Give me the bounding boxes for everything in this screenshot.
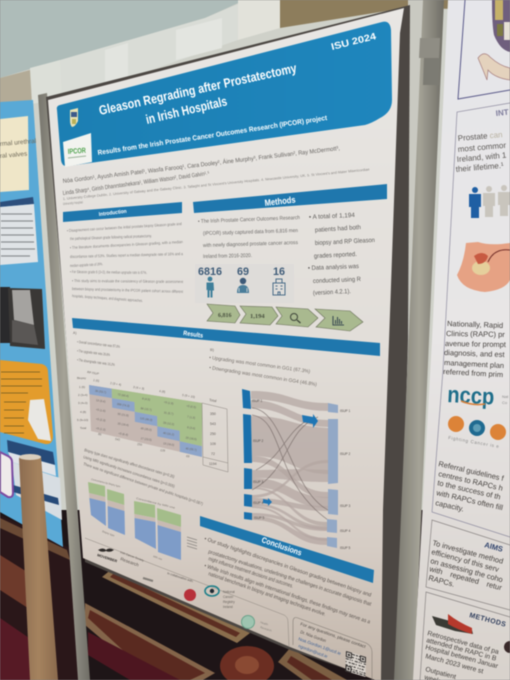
conclusions text: national benchmark in biopsy and imaging techniques evolve.	[207, 571, 326, 618]
methods text right: biopsy and RP Gleason	[315, 237, 375, 247]
introduction text: • For Gleason grade 6 (3+3), the median upgrade rate is 67%.	[70, 269, 147, 275]
aims text: with repeated retur	[428, 564, 503, 592]
methods text: attended the RAPC in B	[425, 637, 497, 663]
table totals column: 350	[210, 412, 216, 416]
conclusions text: • While Irish results align with international findings, these findings may serve as a	[203, 563, 371, 626]
results summary A	[73, 331, 120, 367]
tagline: Fighting Cancer is e	[448, 435, 500, 449]
left stand pole	[38, 93, 90, 680]
sankey flows	[251, 391, 328, 545]
logo: Irish Cancer Society	[120, 550, 145, 568]
table: biopsy versus RP grade: Total	[209, 398, 217, 403]
table: biopsy versus RP grade: 129	[160, 448, 166, 453]
methods text right: conducted using R	[313, 276, 361, 285]
icon: crest	[478, 0, 510, 80]
results summary B: • Downgrading was most common in GG4 (46.8%)	[209, 365, 318, 388]
sankey left bars	[242, 389, 252, 520]
table: biopsy versus RP grade: 69	[186, 454, 190, 459]
table: biopsy versus RP grade: 542	[115, 437, 121, 442]
table: biopsy versus RP grade: 31 (5.7)	[164, 410, 174, 416]
icon: shoe	[432, 614, 473, 634]
referral text: Referral guidelines f	[438, 459, 505, 483]
methods text right: patients had both	[315, 224, 361, 234]
introduction text: the pathological Gleason grade following radical prostatectomy.	[70, 233, 152, 241]
methods text left: Ireland from 2016-2020.	[203, 253, 252, 260]
table: biopsy versus RP grade: 2 (3+4)	[78, 393, 88, 397]
icon: grey people	[483, 185, 510, 217]
introduction text: median upgrade rate of 29%.	[70, 261, 103, 268]
arrow: downgrade	[263, 498, 272, 506]
methods text right: (version 4.2.1).	[313, 288, 351, 297]
subtitle: Results from the Irish Prostate Cancer Outcomes Research (IPCOR) project	[97, 115, 328, 157]
sankey labels	[252, 399, 351, 550]
logo: red partner	[184, 589, 196, 601]
results summary B: B)	[210, 347, 215, 352]
header banner	[57, 22, 392, 167]
icon: QR code	[345, 651, 366, 677]
footer logos	[85, 538, 289, 647]
left poster caption panel: ral valves	[0, 151, 28, 160]
authors: Nóa Gordon¹, Ayush Amish Patel¹, Wasfa Farooq¹, Cara Dooley², Áine Murphy³, Frank Sullivan², Ray McDermott³,	[62, 145, 341, 185]
right neighbouring poster	[413, 0, 510, 680]
table: biopsy versus RP grade: <5 (1.2)	[96, 426, 106, 432]
heading: methods: Methods	[264, 195, 296, 208]
panel: results	[72, 318, 380, 561]
introduction text: • This study aims to evaluate the consistency of Gleason grade assessment	[72, 278, 184, 284]
chart labels: Biopsy type	[102, 530, 115, 538]
icon: doctor	[237, 278, 249, 293]
table: biopsy versus RP grade: 36 (53.7)	[95, 389, 107, 394]
table totals column: 109	[210, 442, 216, 446]
methods text right	[308, 212, 375, 297]
table: biopsy versus RP grade: 86 (15.7)	[140, 406, 152, 412]
referral text: to the success of th	[437, 478, 502, 501]
chart labels: MRI use	[153, 555, 163, 561]
chart labels: Concordance by biopsy type	[91, 478, 121, 488]
sankey labels: ISUP 5	[340, 546, 351, 550]
stats panel	[195, 264, 294, 303]
table: biopsy versus RP grade: <5 (0.5)	[186, 404, 196, 409]
sankey labels: ISUP 5	[254, 516, 265, 520]
collaboration label: In collaboration with:	[167, 571, 194, 583]
chart legend	[187, 537, 197, 549]
carpet floor	[0, 510, 510, 680]
findings notes: There was no significant difference between private and public hospitals (p=0.087)	[83, 461, 204, 506]
contact text: ngordon@ucd.ie	[298, 643, 329, 659]
logo: green partner	[242, 616, 273, 633]
table: biopsy versus RP grade: 40 (55.7)	[185, 446, 197, 452]
methods text: March 2023 were st	[424, 653, 484, 675]
table: biopsy versus RP grade: 2 (3 + 4)	[110, 381, 122, 387]
table: biopsy versus RP grade: 25 (18.5)	[185, 436, 197, 441]
intro text: Ireland, with 1	[456, 151, 507, 164]
table: biopsy versus RP grade: 4 (8)	[159, 389, 166, 394]
right stand pole	[394, 0, 444, 680]
poster sheet	[48, 8, 404, 680]
sankey labels: ISUP 4	[340, 529, 351, 533]
table totals column: 1194	[209, 462, 217, 466]
heading: AIMS: AIMS	[483, 540, 504, 554]
logo: National Cancer Registry Ireland: Cancer	[223, 595, 234, 599]
aims text	[427, 538, 504, 592]
table totals column: 72	[211, 452, 215, 456]
national RAPC text	[443, 319, 507, 379]
anatomy illustration	[457, 242, 510, 292]
title: Gleason Regrading after Prostatectomy	[97, 60, 299, 118]
table: biopsy versus RP grade: <5 (1.6)	[96, 407, 106, 413]
table: biopsy versus RP grade: 7 (1.3)	[187, 415, 196, 420]
table: biopsy versus RP grade: 8 (3.4)	[187, 425, 196, 430]
national RAPC text: management plan	[444, 358, 504, 370]
methods text	[423, 630, 500, 680]
table: biopsy versus RP grade: <5 (6.4)	[118, 431, 128, 437]
display board frame	[46, 5, 410, 680]
methods text left: • The Irish Prostate Cancer Outcomes Research	[198, 215, 300, 225]
left poster orange callout	[0, 360, 53, 444]
contact text	[298, 621, 367, 659]
heading: introduction: Introduction	[99, 209, 128, 218]
sankey labels: ISUP 2	[253, 439, 264, 443]
methods text: Retrospective data of pa	[426, 630, 500, 656]
introduction text: • The literature documents discrepancies in Gleason grading, with a median	[70, 239, 183, 250]
sankey labels: ISUP 2	[340, 452, 351, 456]
logo: nccp: Co	[502, 400, 508, 405]
table: biopsy versus RP grade: 40 (31.2)	[163, 431, 175, 437]
table: biopsy versus RP grade: 86	[98, 432, 102, 437]
table: biopsy versus RP grade: 45 (35.0)	[140, 426, 152, 432]
chevron process	[207, 304, 363, 331]
findings notes: Biopsy type does not significantly affect discordance rates (p=0.35)	[84, 447, 176, 479]
heading: results: Results	[183, 330, 204, 340]
logo: Movember: MOVEMBER	[97, 553, 118, 563]
left poster caption panel	[0, 116, 37, 192]
results summary A: • Overall concordance rate was 57.0%	[77, 340, 120, 349]
national RAPC text: diagnosis, and est	[444, 348, 506, 359]
chevron: magnifier icon	[276, 307, 318, 327]
cardboard poster tube	[19, 454, 58, 680]
heading: results	[72, 318, 380, 356]
referral text: with RAPCs often fill	[435, 488, 504, 512]
table: biopsy versus RP grade: 55 (21.9)	[117, 412, 129, 417]
panel: methods	[193, 184, 387, 331]
stats panel: 69	[237, 266, 249, 278]
logo: green partner: Health	[260, 620, 269, 627]
table totals column: 543	[210, 422, 216, 426]
referral text: centres to RAPCs h	[438, 469, 504, 493]
table: biopsy versus RP grade: 5 (9 + 10)	[182, 393, 195, 399]
title	[97, 60, 299, 127]
table totals column	[202, 403, 228, 472]
left poster purple box	[0, 452, 13, 497]
national RAPC text: avenue for prompt	[445, 339, 507, 349]
contact text: Noa.Gordon.1@ucd.ie	[298, 636, 342, 656]
introduction text: between biopsy and prostatectomy in the IPCOR patient cohort across different	[72, 286, 184, 294]
table: biopsy versus RP grade: 399 (74.3)	[117, 402, 130, 408]
results summary B	[209, 347, 318, 388]
icon: hospital	[273, 279, 285, 295]
table: biopsy versus RP grade: 3 (4+3)	[78, 401, 88, 405]
findings notes: Using MRI significantly increases concordance rates (p<0.005)	[83, 454, 176, 489]
table: biopsy versus RP grade: 115 (46.0)	[140, 416, 153, 422]
left poster table panels	[7, 440, 62, 520]
introduction text: discordance rate of 53%. Studies report a median downgrade rate of 16% and a	[70, 251, 184, 259]
logo: National Cancer Registry Ireland: Ireland	[223, 605, 233, 609]
logo: nccp: Nat	[502, 394, 509, 399]
national RAPC text: Nationally, Rapid	[447, 319, 503, 330]
table: biopsy versus RP grade: 29 (12.2)	[163, 421, 175, 426]
contact text: Dr. Nóa Gordon	[300, 629, 327, 643]
sankey diagram	[242, 389, 351, 550]
table: biopsy versus RP grade: 4 (8)	[80, 410, 86, 414]
chevron: 6,816	[207, 304, 240, 323]
panel: introduction box	[432, 103, 510, 537]
referral text: capacity.	[435, 498, 465, 513]
table: biopsy versus RP grade: <5 (1.9)	[164, 400, 174, 406]
methods text right: grades reported.	[314, 251, 357, 260]
table: biopsy versus RP grade: 5 (9+10)	[77, 418, 88, 422]
intro text: Prostate can	[457, 130, 503, 143]
sankey crossing links	[252, 408, 328, 520]
methods text left: (IPCOR) study captured data from 6,816 men	[203, 228, 298, 237]
wooden floor rail under left poster	[0, 518, 70, 560]
methods text right: • A total of 1,194	[309, 212, 356, 221]
logo: National Cancer Registry Ireland	[205, 586, 235, 609]
sankey labels: ISUP 4	[253, 501, 264, 505]
aims text: To investigate method	[431, 538, 504, 566]
contact box	[293, 618, 372, 680]
panel: methods	[420, 592, 510, 680]
intro text: most commor	[457, 141, 507, 154]
sankey labels: ISUP 3	[340, 504, 351, 508]
national RAPC text: referred from prim	[443, 367, 503, 379]
bar: group 3	[134, 501, 156, 549]
heading: METHODS: METHODS	[468, 612, 507, 629]
results summary B: • Upgrading was most common in GG1 (67.3%)	[209, 355, 311, 375]
heading: conclusions: Conclusions	[260, 535, 303, 558]
aims text: RAPCs.	[427, 573, 456, 589]
methods text left	[198, 215, 300, 260]
logo: IPCOR	[63, 133, 92, 167]
stacked bar charts	[88, 478, 197, 561]
bar: group 2	[107, 489, 125, 535]
chevron: 1,194	[240, 306, 278, 325]
methods text right: • Data analysis was	[308, 263, 359, 272]
results summary A: • The upgrade rate was 26.8%	[77, 349, 111, 357]
results summary A: A)	[73, 331, 76, 335]
contact text: For any questions, please contact	[300, 621, 367, 649]
national RAPC text: Clinics (RAPC) pr	[446, 329, 505, 339]
arrow: upgrade	[302, 414, 318, 428]
table: biopsy versus RP grade: 8 (4.5)	[142, 396, 151, 402]
sankey right bars	[327, 403, 338, 548]
icon: university crest	[70, 108, 78, 127]
title: in Irish Hospitals	[144, 93, 228, 127]
heading: methods	[193, 184, 387, 213]
introduction text: • Disagreement can occur between the initial prostate biopsy Gleason grade and	[67, 221, 182, 233]
table: biopsy versus RP grade: 1 (6)	[93, 378, 100, 383]
stats panel: 6816	[198, 266, 222, 278]
logo: National Cancer Registry Ireland: Registry	[223, 600, 235, 604]
introduction text	[67, 221, 184, 303]
left poster text block	[0, 197, 38, 265]
logo: Irish Cancer Society: Irish Cancer Society	[120, 550, 145, 563]
results summary A: • The downgrade rate was 16.2%	[77, 358, 115, 367]
icon: blue person	[469, 187, 481, 218]
icon: dark circle	[504, 641, 510, 653]
table: biopsy versus RP grade	[77, 370, 228, 472]
table: biopsy versus RP grade: <5 (2.3)	[96, 417, 106, 422]
chevron: 6,816: 6,816	[218, 313, 232, 319]
chart labels: Concordance by MRI use	[136, 497, 176, 510]
affiliations: University Hospital	[63, 200, 83, 206]
table: biopsy versus RP grade: 72 (60.4)	[117, 392, 129, 398]
table: biopsy versus RP grade: 1 (6)	[79, 385, 85, 389]
logo: National Cancer Registry Ireland: National	[223, 590, 235, 594]
left poster caption panel: rmal urethral	[0, 138, 37, 148]
sankey labels: ISUP 3	[253, 480, 264, 484]
conclusions text: • Our study highlights discrepancies in Gleason grading between biopsy and	[203, 536, 372, 599]
panel: conclusions	[200, 516, 374, 626]
findings notes	[83, 447, 204, 506]
heading: INT: INT	[495, 108, 509, 118]
table: biopsy versus RP grade: RP ISUP	[87, 370, 99, 376]
bar: group 4	[157, 508, 181, 560]
aims text: efficiency of this serv	[430, 547, 500, 574]
authors: Linda Sharp⁴, Girish Dhanrstashekara¹, William Watson², David Galvin¹˒⁵	[62, 170, 210, 197]
table: biopsy versus RP grade: 25 (19.4)	[117, 421, 129, 427]
crest frame panel	[458, 0, 510, 99]
table: biopsy versus RP grade: Biopsy	[77, 376, 87, 380]
aims text: on assessing the coho	[429, 556, 504, 584]
stats panel: 16	[273, 266, 285, 278]
referral text	[435, 459, 505, 513]
introduction text: hospitals, biopsy techniques, and diagnostic approaches.	[72, 293, 143, 303]
icon: man	[206, 277, 214, 298]
logo: IPCOR: IPCOR	[68, 146, 87, 156]
intro text: their lifetime.¹	[455, 161, 504, 174]
sankey labels: ISUP 1	[252, 399, 263, 403]
left poster ultrasound images	[0, 287, 45, 349]
light strip beside right pole	[408, 0, 424, 340]
table totals column: 250	[210, 432, 216, 436]
chart labels	[91, 478, 176, 561]
table: biopsy versus RP grade: 250	[137, 442, 143, 447]
left neighbouring poster	[0, 100, 63, 547]
bar: group 1	[88, 482, 106, 526]
intro text	[455, 130, 507, 174]
table: biopsy versus RP grade: 17 (23.5)	[140, 436, 152, 442]
affiliations: 1. University College Dublin. 2. University of Galway and the Galway Clinic. 3. Tallaght and St Vincent's University Hospitals. 4. Newcastle University, UK. 5. St Vincent's and Mater Misericordiae	[63, 167, 370, 201]
chevron: 1,194: 1,194	[250, 313, 265, 320]
logo: grey partner	[143, 578, 153, 581]
logo: green partner: Research	[260, 625, 273, 633]
table: biopsy versus RP grade: Total	[80, 426, 87, 430]
table: biopsy versus RP grade: 3 (4 + 3)	[133, 385, 145, 391]
logo: nccp: nccp	[447, 381, 495, 409]
methods text: Hospital between Januar	[424, 644, 499, 670]
conclusions text: might influence treatment decisions and outcomes.	[207, 556, 294, 590]
chevron: bar chart icon	[315, 309, 363, 331]
panel: introduction	[63, 202, 184, 303]
conference tag: ISU 2024	[330, 31, 378, 53]
logos: three partner badges	[448, 416, 506, 440]
methods text left: with newly diagnosed prostate cancer across	[203, 240, 298, 249]
heading: conclusions	[200, 516, 374, 583]
sankey labels: ISUP 1	[340, 409, 351, 413]
logo: Irish Cancer Society: Research	[120, 556, 140, 568]
table: biopsy versus RP grade: 13 (16.0)	[163, 441, 175, 447]
table: biopsy versus RP grade: 13 (3.4)	[96, 398, 106, 404]
panel: aims	[426, 520, 510, 610]
logo: Movember	[97, 548, 118, 563]
conclusions text: prostatectomy evaluations, underlining the challenges in accurate diagnosis that	[207, 549, 372, 608]
